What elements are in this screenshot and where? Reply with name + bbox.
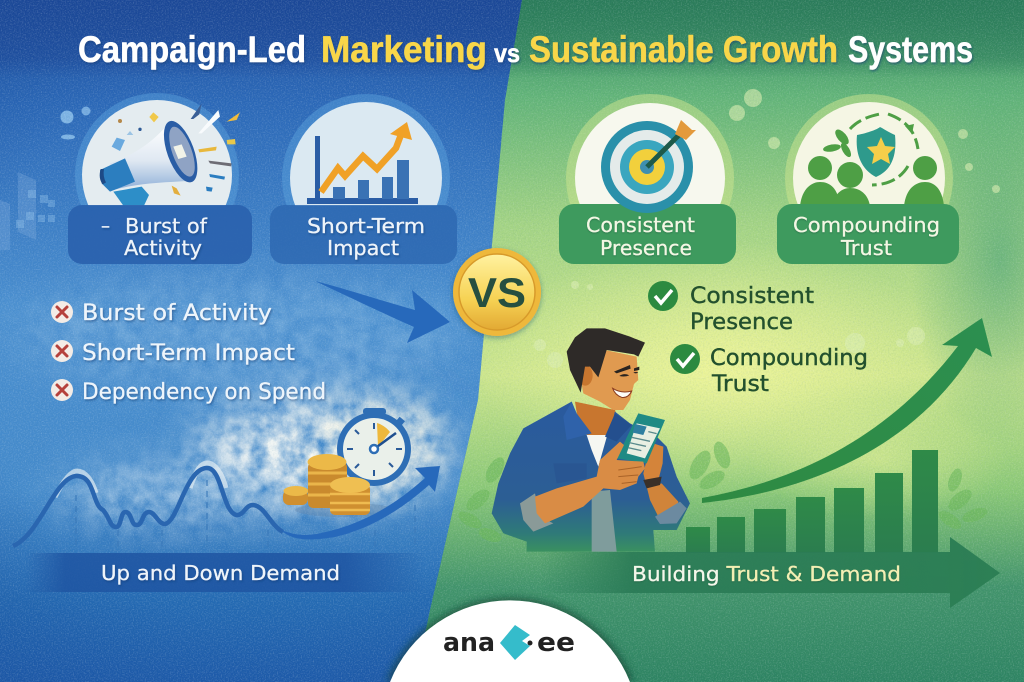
phone <box>617 413 665 463</box>
title <box>78 29 973 70</box>
arrow: rising growth curve <box>702 318 992 503</box>
item: short-term impact: Short-Term Impact <box>82 340 295 366</box>
item: compounding trust: Compounding <box>710 345 868 371</box>
label text: Activity <box>124 236 202 260</box>
icon: coin stacks <box>283 454 395 517</box>
item: consistent presence: Presence <box>690 309 793 335</box>
VS coin <box>453 248 541 336</box>
face <box>578 350 638 410</box>
card: burst of activity <box>68 93 252 264</box>
illustration: man holding phone <box>492 328 690 552</box>
title: vs <box>494 38 520 68</box>
label text: Impact <box>327 236 399 260</box>
title: Marketing <box>321 29 487 70</box>
right forearm and hand <box>647 483 678 517</box>
list: growth benefits <box>648 281 868 397</box>
background: green right side <box>426 0 1024 682</box>
title: Campaign-Led <box>78 29 306 70</box>
icon: people, shield and star <box>800 114 944 206</box>
item: consistent presence: Consistent <box>690 283 814 309</box>
label text <box>586 213 695 260</box>
card: compounding trust <box>777 94 959 264</box>
rolled sleeve <box>520 493 553 532</box>
VS coin: VS <box>468 269 526 316</box>
item: dependency on spend: Dependency on Spend <box>82 379 326 405</box>
label text: Presence <box>600 236 692 260</box>
left arm and hand <box>535 442 645 523</box>
label text: – <box>101 216 110 237</box>
label text: Compounding <box>793 213 940 237</box>
icon: megaphone <box>100 103 240 206</box>
label text: Trust <box>840 236 892 260</box>
list: campaign drawbacks <box>51 300 326 405</box>
label text <box>101 214 208 260</box>
item: compounding trust <box>670 344 868 397</box>
item: compounding trust: Trust <box>711 371 769 397</box>
card: short-term impact <box>270 94 457 264</box>
icon: stopwatch <box>337 408 411 486</box>
label text: Burst of <box>125 214 208 238</box>
band label: Building Trust & Demand <box>632 562 901 586</box>
arrow: blue pointing to VS <box>315 281 450 343</box>
arrow: demand trend rising <box>281 466 440 539</box>
label text <box>307 214 425 260</box>
item: burst of activity: Burst of Activity <box>82 300 272 326</box>
logo badge: ee <box>537 628 575 658</box>
label text: Consistent <box>586 213 695 237</box>
neck <box>575 402 618 437</box>
item: consistent presence <box>648 281 814 335</box>
icon: target with arrow <box>601 120 696 213</box>
title: Systems <box>848 29 973 70</box>
label text: Short-Term <box>307 214 425 238</box>
title: Sustainable Growth <box>529 29 838 70</box>
logo badge: ana <box>443 628 495 658</box>
chart: growing green bars <box>686 450 938 553</box>
logo badge <box>386 597 634 682</box>
band label: Up and Down Demand <box>101 561 340 585</box>
label text <box>793 213 940 260</box>
chart: up and down demand <box>13 408 440 592</box>
icon: rising bar chart <box>307 122 418 204</box>
background: blue left side <box>0 0 522 682</box>
card: consistent presence <box>559 94 736 264</box>
band arrow: building trust and demand <box>540 537 1000 608</box>
